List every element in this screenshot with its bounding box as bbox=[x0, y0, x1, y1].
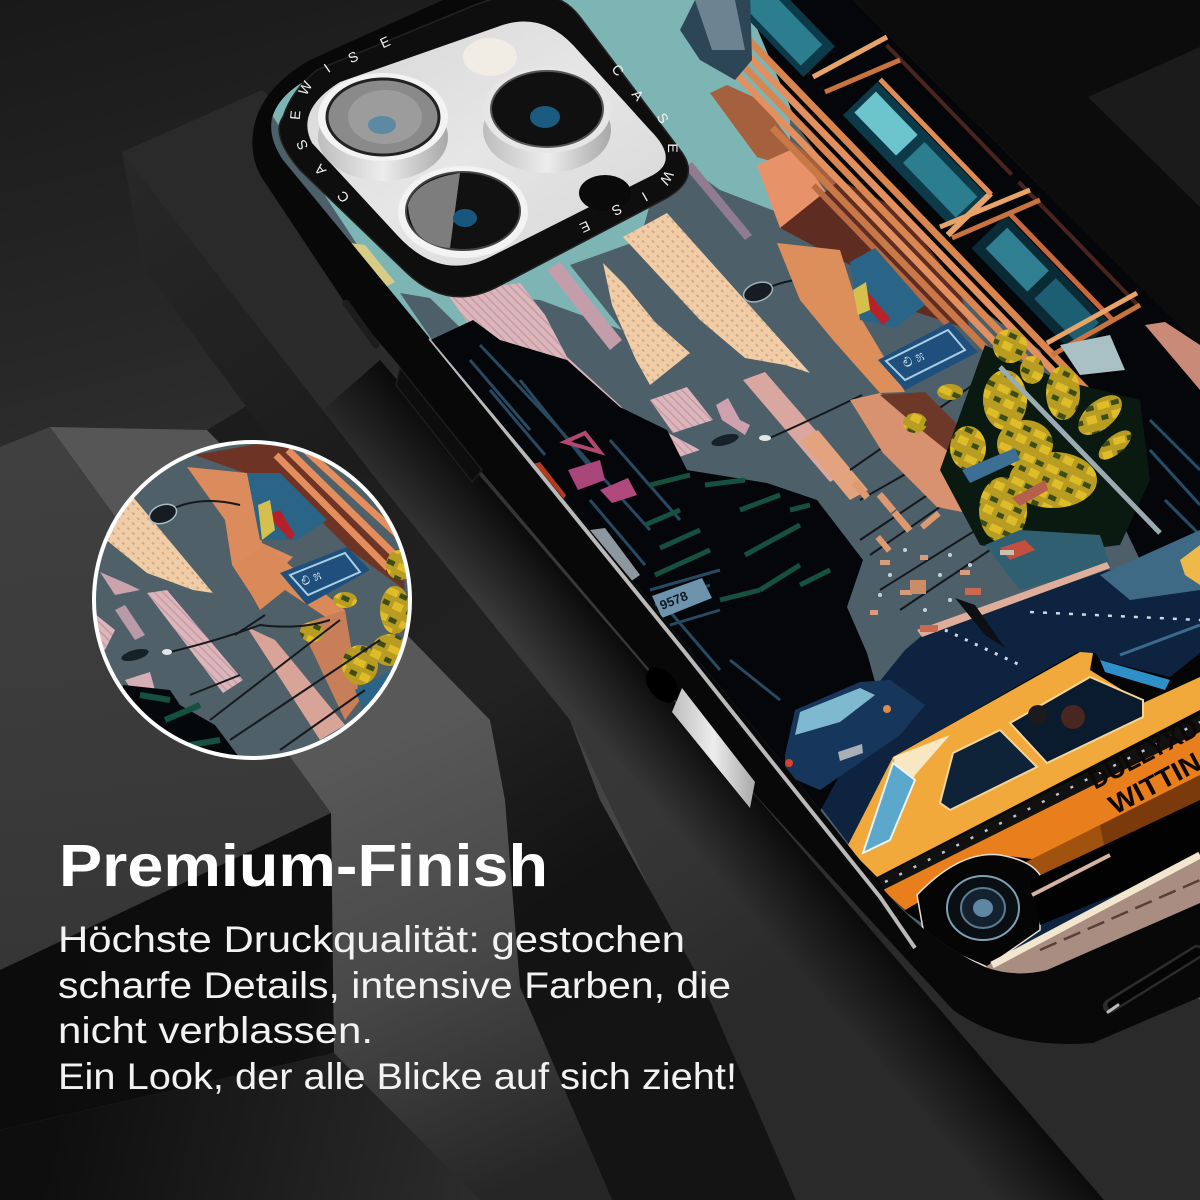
casewise right ring text bbox=[577, 61, 681, 236]
casewise left ring text: W bbox=[295, 78, 316, 98]
magnified foliage bbox=[300, 550, 414, 685]
sidewalk pink edge bbox=[917, 562, 1110, 637]
lens two bbox=[483, 67, 611, 173]
blue street sign bbox=[878, 322, 978, 390]
yellow building fragment bbox=[350, 243, 395, 287]
red sign bbox=[530, 462, 566, 502]
upper dark brick marks bbox=[885, 44, 1013, 176]
casewise right ring text: E bbox=[577, 218, 593, 236]
flash bbox=[463, 38, 517, 76]
magnified ornate blue sign bbox=[247, 473, 327, 540]
dusk sky bbox=[271, 0, 1200, 974]
taxi bbox=[847, 652, 1200, 967]
salmon block bbox=[757, 148, 828, 228]
magnified peach tower bbox=[90, 497, 213, 593]
teal sky bbox=[262, 0, 790, 345]
lidar bbox=[579, 175, 631, 211]
phone edge shade bbox=[300, 360, 1104, 1200]
magnified dark tree bbox=[120, 685, 245, 765]
lens three bbox=[398, 166, 528, 258]
building stripes bbox=[736, 0, 1138, 388]
body under shadow bbox=[1030, 800, 1200, 925]
casewise right ring text: A bbox=[629, 86, 648, 104]
wheel arch bbox=[917, 854, 1040, 967]
magnified lamps and wires bbox=[170, 501, 380, 750]
camera ring bbox=[279, 0, 688, 297]
phone bbox=[252, 0, 1200, 1044]
taxi silhouette bbox=[847, 652, 1200, 967]
lane dots bbox=[945, 630, 1020, 665]
lens one bbox=[318, 73, 448, 181]
casewise left ring text: S bbox=[345, 48, 361, 66]
street lamps and wires bbox=[770, 280, 990, 611]
striped building bbox=[650, 387, 713, 433]
casewise right ring text: I bbox=[639, 189, 651, 205]
storefronts bbox=[985, 530, 1110, 590]
magnified pink building bbox=[147, 590, 243, 693]
casewise left ring text: S bbox=[293, 137, 311, 153]
screen artwork: 9578 bbox=[658, 588, 690, 613]
silver side button bbox=[672, 688, 755, 808]
windows row two bbox=[837, 78, 994, 237]
body copy: Ein Look, der alle Blicke auf sich zieht! bbox=[58, 1056, 737, 1097]
foreground shadow bbox=[0, 1053, 480, 1200]
windshield bbox=[863, 763, 915, 853]
roof highlight bbox=[893, 735, 950, 800]
casewise left ring text: A bbox=[310, 161, 329, 179]
address plate bbox=[652, 578, 712, 618]
street haze dots bbox=[870, 550, 1014, 632]
wheel bbox=[947, 876, 1019, 940]
camera glass bbox=[307, 21, 666, 266]
magnified lamp head bbox=[147, 501, 179, 527]
heading: Premium-Finish bbox=[59, 833, 548, 899]
white tag bbox=[590, 528, 640, 582]
pink signs bbox=[568, 460, 605, 490]
bird shadow bbox=[955, 598, 1005, 648]
screen artwork: ಲಿ ೫ bbox=[900, 347, 927, 372]
windows row three bbox=[972, 214, 1114, 344]
right shop front bbox=[1145, 322, 1200, 390]
street bbox=[800, 565, 1200, 970]
passenger silhouettes bbox=[1061, 705, 1085, 729]
lower block top bbox=[0, 427, 331, 970]
volume button bbox=[396, 368, 482, 482]
sidewalk blue bbox=[1100, 530, 1200, 600]
black upper facade bbox=[745, 0, 1200, 560]
windows row one bbox=[750, 0, 835, 77]
casewise left ring text bbox=[287, 33, 393, 206]
casewise right ring text: E bbox=[665, 143, 681, 153]
left side recess bbox=[346, 303, 376, 345]
magnified orange jag bbox=[187, 467, 293, 597]
bottom port bbox=[1110, 952, 1197, 1006]
side hole bbox=[639, 661, 685, 709]
phone body bbox=[252, 0, 1200, 1044]
magnified street sign bbox=[280, 547, 370, 605]
yellow taxi corner bbox=[1180, 545, 1200, 585]
peach tower bbox=[623, 213, 810, 373]
screen artwork bbox=[271, 0, 1200, 974]
pink tall buildings bbox=[447, 283, 700, 470]
pavement bbox=[985, 855, 1200, 1000]
casewise left ring text: E bbox=[287, 110, 303, 120]
orange lower body bbox=[883, 732, 1200, 910]
tree yellow foliage bbox=[903, 329, 1150, 555]
casewise left ring text: C bbox=[334, 188, 352, 206]
detail magnifier circle: ಲಿ ೫ bbox=[298, 566, 323, 589]
edge highlight bbox=[430, 338, 915, 948]
chrome strip bbox=[878, 715, 1200, 890]
casewise left ring text: E bbox=[377, 33, 393, 51]
lower block front bbox=[0, 813, 334, 1130]
lamp head bbox=[742, 281, 774, 303]
tree green dashes bbox=[645, 475, 830, 600]
main block side face bbox=[122, 152, 377, 480]
floor lit area bbox=[50, 427, 612, 1200]
main block shadow band bbox=[207, 380, 796, 1200]
casewise right ring text: S bbox=[654, 110, 672, 126]
dark right blocks bbox=[850, 0, 1200, 360]
body copy: nicht verblassen. bbox=[58, 1010, 373, 1051]
blue car bbox=[785, 680, 925, 790]
body copy: Höchste Druckqualität: gestochen bbox=[58, 919, 685, 960]
orange jag bbox=[777, 243, 905, 393]
magnified brown mass bbox=[195, 440, 405, 590]
cornices bbox=[813, 37, 1140, 355]
casewise right ring text: W bbox=[656, 168, 677, 188]
body copy bbox=[58, 919, 737, 1097]
scattered brick blocks bbox=[852, 480, 941, 553]
taxi yellow body bbox=[847, 652, 1200, 877]
side front window bbox=[1010, 677, 1143, 763]
body copy: scharfe Details, intensive Farben, die bbox=[58, 965, 731, 1006]
distant brick top bbox=[710, 85, 836, 186]
side rear window bbox=[940, 730, 1037, 810]
detail magnifier circle bbox=[90, 440, 414, 765]
right blue lines bbox=[1150, 420, 1200, 535]
casewise left ring text: I bbox=[321, 60, 333, 76]
small shop signs bbox=[962, 448, 1020, 483]
casewise right ring text: C bbox=[609, 61, 627, 79]
door name: WITTIN bbox=[1104, 747, 1200, 820]
casewise right ring text: S bbox=[609, 201, 625, 219]
lower facade bbox=[850, 393, 967, 513]
magnified lower facade bbox=[235, 545, 345, 620]
brown mass bbox=[780, 180, 970, 330]
ornate blue sign bbox=[850, 248, 925, 328]
magnified facade stripes bbox=[276, 445, 412, 568]
peach spire tower bbox=[603, 263, 690, 385]
building glyph lines bbox=[470, 345, 780, 700]
lamp pole bbox=[1000, 367, 1160, 533]
dark building bbox=[420, 320, 880, 885]
roof rear glass bbox=[1100, 660, 1170, 690]
pink orange tower bbox=[743, 372, 834, 482]
magnified blue patches bbox=[355, 665, 410, 715]
gray step building bbox=[400, 293, 459, 340]
camera module bbox=[279, 0, 688, 297]
upper ornament bbox=[680, 0, 752, 80]
brick ledges bbox=[751, 38, 1090, 388]
